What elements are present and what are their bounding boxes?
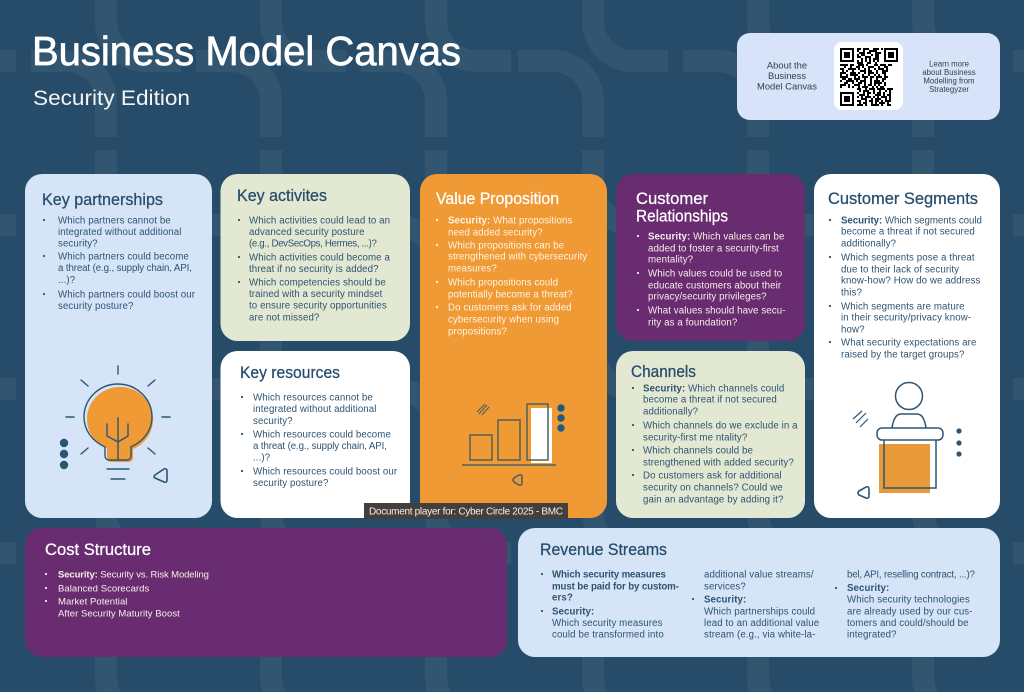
question list: Which resources cannot be (253, 392, 373, 404)
question list: in their security/privacy know- (841, 312, 971, 324)
cost list: Market Potential (58, 596, 127, 608)
question list: Security: Which channels could (643, 384, 784, 394)
question list (238, 216, 390, 324)
heading: Cost Structure (45, 541, 151, 559)
question list: Security: Which values can be (648, 232, 784, 242)
question list (241, 392, 398, 489)
question list: mentality? (648, 254, 694, 266)
panel: channels (616, 351, 805, 518)
question list: additionally? (841, 238, 897, 250)
tooltip: document player (364, 503, 568, 519)
question list: additionally? (643, 406, 699, 418)
question list: security? (58, 238, 98, 250)
revenue questions column 3: bel, API, reselling contract, ...)? (847, 570, 976, 580)
question list: gain an advantage by adding it? (643, 494, 784, 506)
heading: Revenue Streams (540, 541, 667, 559)
question list (632, 384, 798, 506)
revenue questions column 2: additional value streams/ (704, 570, 814, 580)
question list: Security: What propositions (448, 216, 572, 226)
panel: revenue streams (518, 528, 1000, 657)
revenue questions column 1 (541, 570, 679, 640)
heading: Customer Segments (828, 190, 978, 208)
about text: Model Canvas (757, 80, 817, 92)
revenue questions column 2: Security: (704, 594, 746, 606)
question list: security-first me ntality? (643, 432, 748, 444)
panel: about with QR code (737, 33, 1000, 120)
panel: value proposition (420, 174, 607, 518)
panel: cost structure (25, 528, 507, 657)
question list: What security expectations are (841, 338, 976, 348)
question list: due to their lack of security (841, 264, 959, 276)
about text: Business (768, 70, 806, 81)
revenue questions column 2: stream (e.g., via white-la- (704, 630, 815, 640)
question list: security? (253, 416, 293, 427)
question list: strengthened with cybersecurity (448, 252, 587, 262)
revenue questions column 1: Which security measures (552, 570, 666, 580)
cost list: Security: Security vs. Risk Modeling (58, 570, 209, 580)
question list: Which channels do we exclude in a (643, 420, 798, 432)
revenue questions column 2: services? (704, 582, 746, 592)
cost list: After Security Maturity Boost (58, 608, 180, 620)
question list: Which activities could lead to an (249, 216, 390, 226)
revenue questions column 3: are already used by our cus- (847, 606, 973, 618)
question list: measures? (448, 264, 497, 274)
question list: strengthened with added security? (643, 458, 794, 468)
heading: Key partnerships (42, 191, 163, 209)
question list: are not missed? (249, 312, 320, 324)
question list: What values should have secu- (648, 306, 786, 316)
panel: key resources (220, 351, 410, 518)
revenue questions column 3: Which security technologies (847, 594, 970, 606)
revenue questions column 3: Security: (847, 583, 889, 594)
question list: to ensure security opportunities (249, 300, 387, 312)
tooltip: document player: Document player for: Cyber Circle 2025 - BMC (369, 506, 563, 518)
question list: Security: Which segments could (841, 216, 982, 226)
revenue questions column 3: tomers and could/should be (847, 618, 969, 629)
revenue questions column 1: Which security measures (552, 618, 663, 629)
question list: potentially become a threat? (448, 290, 573, 300)
question list: Which resources could become (253, 430, 391, 440)
question list: Which values could be used to (648, 268, 782, 280)
panel: customer relationships (616, 174, 805, 341)
question list: Which resources could boost our (253, 466, 398, 478)
icon: light bulb with tree (60, 366, 170, 482)
question list: advanced security posture (249, 227, 365, 238)
icon: bar chart (462, 404, 565, 485)
title: Business Model Canvas (32, 28, 461, 74)
question list: Which propositions could (448, 278, 558, 288)
question list: cybersecurity when using (448, 314, 559, 326)
revenue questions column 1: ers? (552, 592, 573, 604)
heading: Channels (631, 363, 696, 381)
learn more text: Modelling from (923, 76, 975, 86)
question list: rity as a foundation? (648, 318, 738, 328)
question list: need added security? (448, 228, 543, 238)
question list: Which partners cannot be (58, 216, 171, 226)
question list: Which segments pose a threat (841, 252, 975, 264)
question list: security on channels? Could we (643, 482, 783, 494)
question list: integrated without additional (58, 227, 182, 238)
question list: educate customers about their (648, 280, 782, 292)
heading: Customer (636, 190, 708, 208)
question list: become a threat if not secured (841, 226, 975, 238)
revenue questions column 2: lead to an additional value (704, 618, 819, 629)
about text: About the (767, 60, 807, 70)
question list: Which propositions can be (448, 240, 564, 252)
QR code (834, 42, 903, 110)
revenue questions column 1: Security: (552, 606, 594, 618)
question list: security posture? (58, 301, 134, 312)
question list: propositions? (448, 326, 507, 338)
question list: Which activities could become a (249, 252, 390, 264)
question list: Which segments are mature (841, 302, 965, 312)
revenue questions column 3 (835, 570, 976, 640)
question list: Do customers ask for additional (643, 470, 782, 482)
revenue questions column 2: Which partnerships could (704, 606, 815, 618)
question list: become a threat if not secured (643, 394, 777, 406)
question list: Do customers ask for added (448, 302, 572, 314)
question list: Which competencies should be (249, 278, 386, 288)
revenue questions column 3: integrated? (847, 630, 897, 640)
heading: Relationships (636, 208, 728, 226)
question list (829, 216, 982, 360)
learn more text: Learn more (929, 60, 969, 68)
question list: (e.g., DevSecOps, Hermes, ...)? (249, 238, 378, 250)
question list: threat if no security is added? (249, 264, 379, 275)
question list: security posture? (253, 478, 329, 489)
question list: ...)? (58, 275, 76, 286)
question list: privacy/security privileges? (648, 292, 767, 302)
heading (636, 190, 728, 226)
heading: Value Proposition (436, 190, 559, 208)
cost list: Balanced Scorecards (58, 584, 149, 594)
subtitle: Security Edition (33, 87, 190, 110)
panel: key partnerships (25, 174, 212, 518)
revenue questions column 1: must be paid for by custom- (552, 582, 679, 592)
learn more text: Strategyzer (929, 85, 969, 94)
question list: a threat (e.g., supply chain, API, (253, 441, 387, 452)
panel: key activities (220, 174, 410, 341)
question list (436, 216, 587, 338)
heading: Key resources (240, 364, 340, 382)
question list: know-how? How do we address (841, 276, 981, 286)
question list: a threat (e.g., supply chain, API, (58, 263, 192, 274)
cost list (45, 570, 209, 620)
revenue questions column 1: could be transformed into (552, 630, 664, 640)
icon: person at podium (853, 382, 962, 498)
question list: how? (841, 324, 865, 336)
revenue questions column 2 (692, 570, 819, 640)
panel: customer segments (814, 174, 1000, 518)
question list: ...)? (253, 452, 271, 464)
question list: Which partners could become (58, 252, 189, 262)
heading: Key activites (237, 187, 327, 205)
question list: Which channels could be (643, 446, 753, 456)
question list: integrated without additional (253, 404, 377, 415)
question list: Which partners could boost our (58, 290, 196, 300)
learn more text: about Business (922, 68, 976, 77)
question list (637, 232, 786, 328)
question list: added to foster a security-first (648, 244, 779, 254)
question list: raised by the target groups? (841, 350, 965, 360)
question list (43, 216, 196, 312)
question list: trained with a security mindset (249, 289, 383, 300)
question list: this? (841, 288, 862, 298)
